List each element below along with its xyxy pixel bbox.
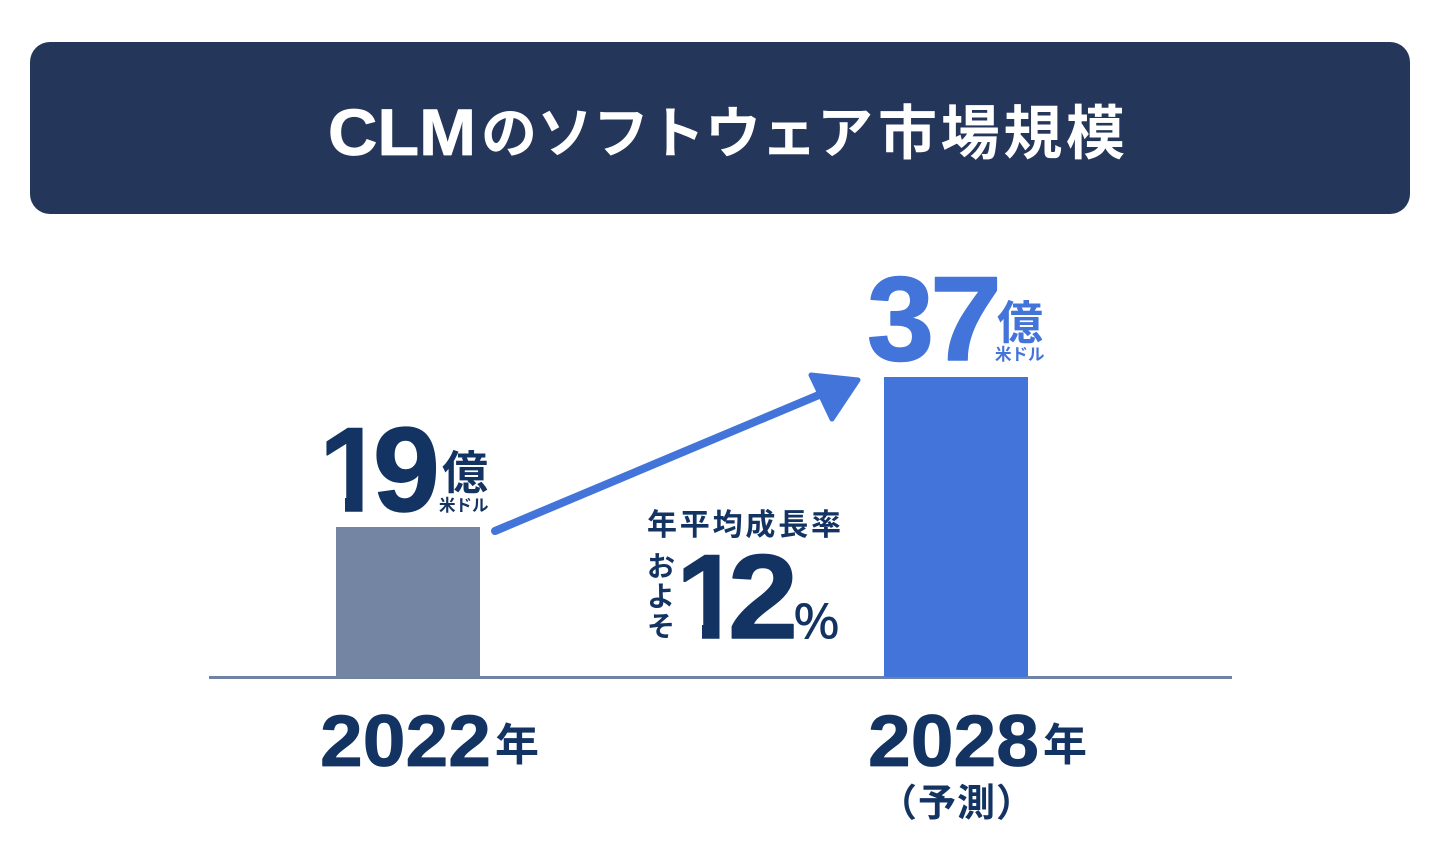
growth arrow: [495, 375, 858, 531]
year label: 2028 forecast: 年: [1043, 709, 1087, 773]
year label: 2022: 年: [495, 709, 539, 773]
year label: 2022: 2022: [320, 701, 491, 782]
value label: 37 oku USD: 7: [930, 252, 1002, 386]
title banner: CLM: [328, 95, 476, 169]
title banner: 市場規模: [878, 86, 1125, 171]
CAGR callout: [648, 508, 840, 639]
title banner: [30, 42, 1410, 214]
title banner: のソフトウェア: [481, 89, 873, 170]
bar: 2028: [884, 377, 1028, 677]
value label: 37 oku USD: [867, 252, 1044, 386]
value label: 37 oku USD: 3: [867, 252, 934, 386]
value label: 19 oku USD: 9: [373, 403, 440, 537]
CAGR callout: 1: [676, 530, 743, 664]
value label: 19 oku USD: 1: [319, 403, 386, 537]
bar: 2022: [336, 527, 480, 677]
value label: 37 oku USD: 億: [997, 287, 1043, 353]
CAGR callout: そ: [647, 605, 675, 645]
value label: 19 oku USD: 米ドル: [439, 492, 488, 516]
value label: 19 oku USD: [326, 426, 488, 513]
CAGR callout: お: [647, 545, 675, 585]
value label: 19 oku USD: 億: [442, 437, 488, 503]
year label: 2028 forecast: [868, 701, 1087, 827]
CAGR callout: %: [794, 586, 839, 652]
CAGR callout: 2: [728, 530, 798, 664]
CAGR callout: 年平均成長率: [647, 500, 841, 544]
year label: 2028 forecast: 2028: [868, 701, 1039, 782]
year label: 2028 forecast: （予測）: [879, 772, 1034, 827]
value label: 37 oku USD: 米ドル: [995, 341, 1044, 365]
baseline axis: [209, 676, 1232, 679]
CAGR callout: よ: [647, 575, 675, 615]
